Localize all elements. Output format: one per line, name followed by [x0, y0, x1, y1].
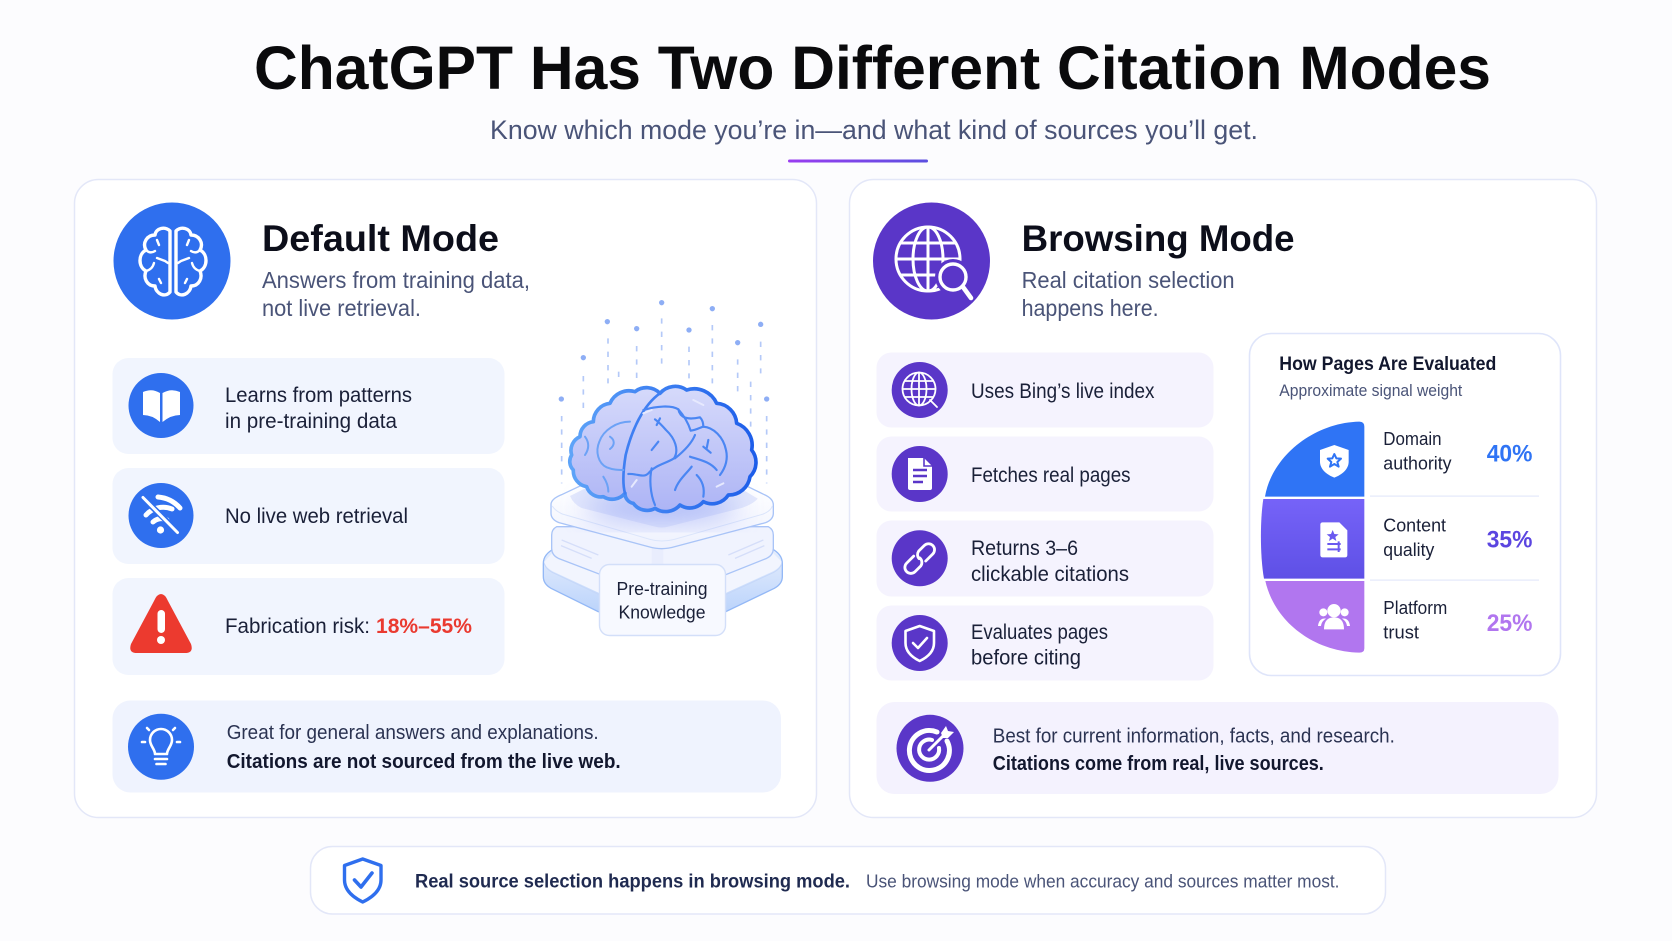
segment: platform trust [1265, 581, 1364, 653]
icon: shield check [344, 859, 381, 902]
icon: link [892, 530, 948, 586]
text [225, 615, 472, 638]
heading: browsing mode: Browsing Mode [1022, 218, 1295, 259]
title underline [788, 160, 928, 162]
row: returns citations [876, 520, 1214, 596]
item: content quality: quality [1383, 540, 1434, 560]
item: content quality [1383, 516, 1532, 560]
text: in pre-training data [225, 410, 397, 433]
panel: how pages are evaluated [1250, 334, 1560, 676]
item: content quality: 35% [1487, 526, 1532, 554]
text: browsing mode description: Real citation selection [1022, 267, 1235, 293]
row: evaluates pages [876, 606, 1214, 680]
row: fetches pages [876, 436, 1214, 512]
text: default mode description [262, 267, 530, 321]
text: Best for current information, facts, and research. [993, 726, 1395, 748]
footer callout [310, 846, 1386, 914]
panel: browsing mode [850, 180, 1596, 818]
text: Great for general answers and explanations. [227, 722, 599, 744]
text: clickable citations [971, 563, 1129, 586]
subtitle: Know which mode you’re in—and what kind of sources you’ll get. [490, 115, 1258, 145]
text: Returns 3–6 [971, 537, 1078, 560]
text: Citations are not sourced from the live web. [227, 751, 621, 773]
text: Citations come from real, live sources. [993, 753, 1324, 775]
knowledge platform [543, 486, 782, 612]
item: platform trust: trust [1383, 622, 1419, 642]
row: fabrication risk [112, 578, 504, 675]
item: domain authority: authority [1383, 454, 1452, 474]
icon: globe with magnifier [873, 202, 990, 320]
item: domain authority: Domain [1383, 429, 1442, 449]
item: platform trust: 25% [1487, 610, 1532, 637]
icon: book [128, 373, 194, 438]
segment: content quality [1261, 499, 1364, 579]
text: default mode description: Answers from training data, [262, 267, 530, 293]
text: recommendation: Use browsing mode when accuracy and sources matter most. [866, 872, 1340, 892]
row: bing index [876, 352, 1214, 428]
text: before citing [971, 646, 1081, 670]
segment: domain authority [1265, 422, 1364, 497]
label: pre-training knowledge: Pre-training [616, 579, 708, 599]
top slab [551, 486, 773, 549]
subheading: Approximate signal weight [1279, 382, 1463, 400]
text: key takeaway: Real source selection happens in browsing mode. [415, 870, 850, 892]
text [227, 722, 621, 773]
text: browsing mode description: happens here. [1022, 295, 1159, 321]
text: No live web retrieval [225, 505, 408, 528]
brain [570, 386, 756, 512]
middle slab [552, 527, 773, 575]
text: Fetches real pages [971, 464, 1130, 487]
icon: light bulb [128, 714, 194, 780]
text: browsing mode description [1022, 267, 1235, 321]
illustration: brain on knowledge platform [543, 300, 782, 636]
text: Uses Bing’s live index [971, 380, 1155, 403]
bottom slab [543, 548, 782, 612]
icon: small globe [892, 362, 948, 418]
text [225, 384, 412, 433]
text: default mode description: not live retrieval. [262, 295, 421, 321]
callout: browsing mode summary [876, 702, 1558, 794]
callout: default mode summary [112, 700, 781, 792]
icon: brain [114, 202, 230, 320]
data streams [559, 300, 769, 483]
heading: How Pages Are Evaluated [1279, 354, 1496, 375]
row: learns from patterns [112, 358, 504, 454]
icon: warning triangle [130, 594, 192, 653]
item: platform trust [1383, 598, 1532, 642]
item: domain authority [1383, 429, 1532, 474]
title: ChatGPT Has Two Different Citation Modes [254, 34, 1491, 102]
icon: target [896, 715, 964, 782]
text: Fabrication risk: [225, 615, 370, 638]
label: pre-training knowledge [600, 564, 726, 636]
row: no live web retrieval [112, 468, 504, 564]
brain shadow [584, 497, 740, 519]
text [993, 726, 1395, 775]
panel: default mode [74, 180, 816, 818]
icon: shield check [892, 615, 948, 671]
icon: wifi off [128, 483, 194, 548]
item: platform trust: Platform [1383, 598, 1447, 618]
label: pre-training knowledge: Knowledge [618, 602, 706, 622]
icon: document [892, 446, 948, 502]
item: domain authority: 40% [1487, 440, 1532, 468]
chart: signal weight segments [1261, 422, 1364, 653]
text: Evaluates pages [971, 621, 1108, 644]
text [971, 621, 1108, 670]
heading: default mode: Default Mode [262, 218, 499, 259]
item: content quality: Content [1383, 516, 1446, 536]
text [971, 537, 1129, 586]
text: 18%–55% [376, 615, 472, 638]
text: Learns from patterns [225, 384, 412, 407]
